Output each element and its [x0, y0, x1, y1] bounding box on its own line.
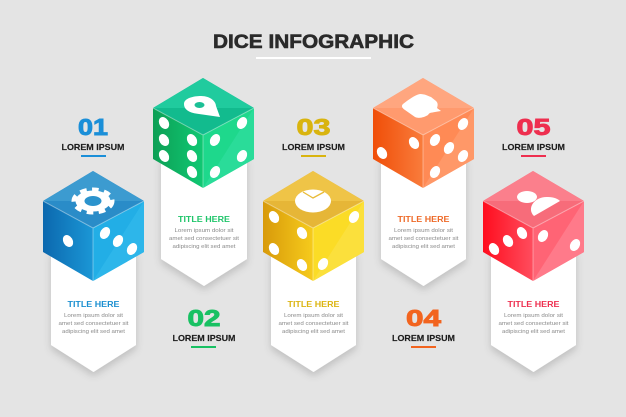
column 5: red die — [483, 171, 584, 372]
panel 4 text: adipiscing elit sed amet — [392, 244, 455, 250]
die 3 — [263, 171, 364, 281]
pips — [267, 209, 361, 273]
die 5 — [483, 171, 584, 281]
panel 1 text: Lorem ipsum dolor sit — [64, 313, 123, 319]
pips — [375, 116, 470, 180]
panel 1 text: amet sed consectetuer sit — [58, 321, 129, 327]
column 2: green die — [153, 78, 254, 286]
panel 1 text: adipiscing elit sed amet — [62, 329, 125, 335]
panel 5 — [491, 250, 576, 372]
panel 5 text: adipiscing elit sed amet — [502, 329, 565, 335]
panel 2 text: amet sed consectetuer sit — [169, 236, 239, 242]
panel 5 text: Lorem ipsum dolor sit — [504, 313, 563, 319]
die 1 — [43, 171, 144, 281]
title: DICE INFOGRAPHIC — [213, 32, 414, 53]
die 4 — [373, 78, 474, 188]
step 05 label — [502, 114, 565, 157]
column 3: yellow die — [263, 171, 364, 372]
title underline — [256, 57, 371, 59]
step 01 label — [62, 114, 125, 157]
panel 3 text: adipiscing elit sed amet — [282, 329, 345, 335]
panel 1 text — [58, 299, 129, 335]
die 2 — [153, 78, 254, 188]
panel 2 — [161, 157, 247, 286]
panel 2 text: TITLE HERE — [178, 214, 230, 224]
icon: user — [517, 191, 560, 216]
panel 3 text — [278, 299, 349, 335]
step 04 label — [392, 305, 455, 348]
step 02 label: LOREM IPSUM — [172, 333, 236, 343]
icon: location pin — [184, 96, 220, 117]
pips — [157, 115, 249, 180]
panel 3 — [271, 250, 356, 372]
step 02 label — [172, 305, 236, 348]
column 1: blue die — [43, 171, 144, 372]
step 05 label: LOREM IPSUM — [502, 142, 565, 152]
panel 1 — [51, 250, 136, 372]
panel 1 text: TITLE HERE — [68, 299, 120, 309]
pips — [487, 225, 582, 257]
step 01 label: 01 — [78, 114, 108, 140]
step 03 label: 03 — [296, 114, 330, 140]
panel 4 — [381, 157, 466, 286]
step 02 label: 02 — [188, 305, 220, 331]
panel 4 text — [388, 214, 459, 250]
step 01 label: LOREM IPSUM — [62, 142, 125, 152]
panel 2 text: adipiscing elit sed amet — [172, 244, 236, 250]
step 04 label: LOREM IPSUM — [392, 333, 455, 343]
step 04 label: 04 — [406, 305, 441, 331]
step 05 label: 05 — [516, 114, 551, 140]
column 4: orange die — [373, 78, 474, 286]
panel 5 text — [498, 299, 569, 335]
panel 2 text — [169, 214, 239, 250]
panel 4 text: TITLE HERE — [398, 214, 450, 224]
step 03 label — [282, 114, 345, 157]
panel 4 text: amet sed consectetuer sit — [388, 236, 459, 242]
panel 5 text: amet sed consectetuer sit — [498, 321, 569, 327]
panel 3 text: Lorem ipsum dolor sit — [284, 313, 343, 319]
panel 5 text: TITLE HERE — [508, 299, 560, 309]
panel 3 text: amet sed consectetuer sit — [278, 321, 349, 327]
step 03 label: LOREM IPSUM — [282, 142, 345, 152]
panel 4 text: Lorem ipsum dolor sit — [394, 228, 453, 234]
icon: pie chart — [295, 190, 331, 212]
icon: gear — [74, 190, 112, 212]
pips — [61, 225, 139, 257]
panel 3 text: TITLE HERE — [288, 299, 340, 309]
icon: speech bubble — [402, 94, 441, 118]
panel 2 text: Lorem ipsum dolor sit — [174, 228, 234, 234]
